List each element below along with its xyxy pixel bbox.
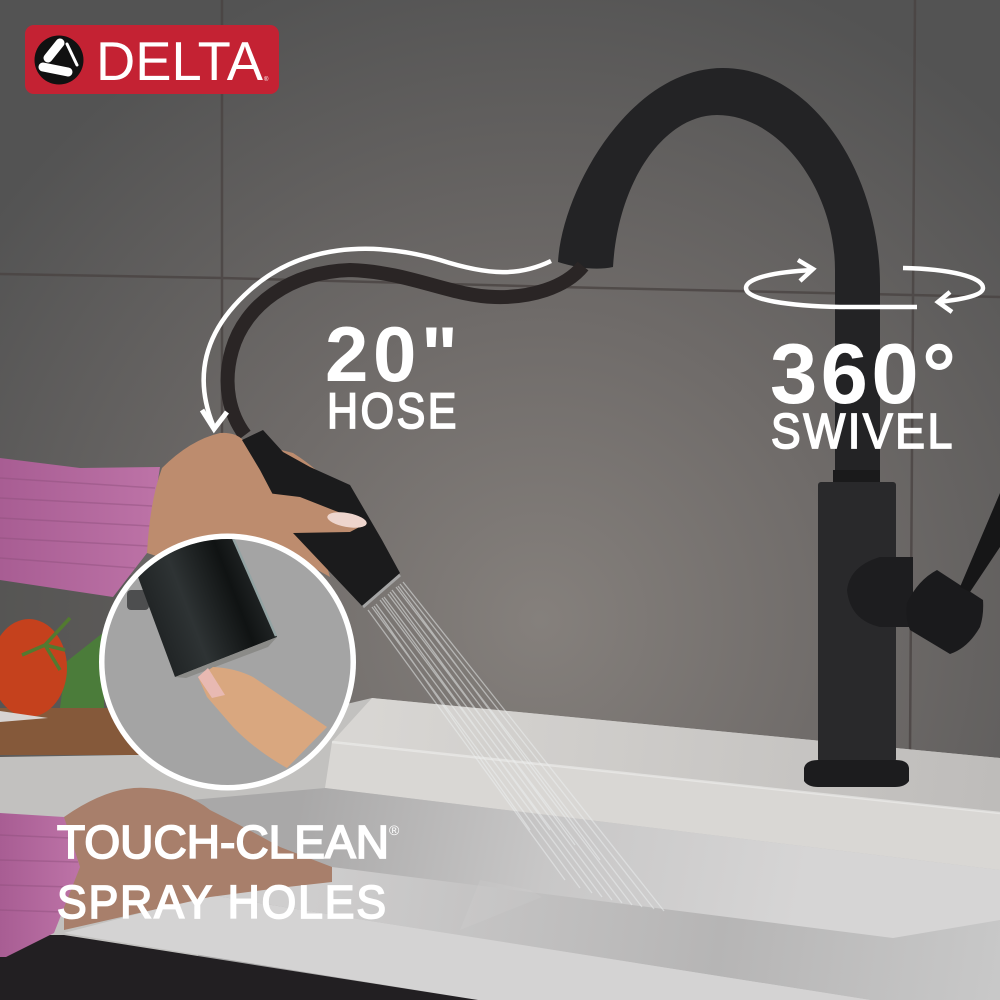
countertop and sink bbox=[0, 698, 1000, 1000]
label: touch-clean spray holes bbox=[57, 816, 400, 928]
faucet handle hub bbox=[847, 557, 913, 627]
Delta logo: DELTA bbox=[96, 30, 263, 92]
faucet lever bbox=[960, 493, 1000, 592]
hand bbox=[147, 433, 367, 577]
lower hand and sleeve bbox=[0, 788, 332, 957]
spray head bbox=[242, 430, 400, 607]
label: touch-clean spray holes: ® bbox=[389, 822, 400, 838]
label: 360 degree swivel: 360° bbox=[770, 327, 956, 422]
faucet handle cap bbox=[906, 570, 983, 654]
label: 20 inch hose: 20" bbox=[325, 310, 458, 398]
arrow: hose length bbox=[202, 249, 551, 429]
cutting board and vegetables bbox=[0, 618, 140, 755]
sleeve bbox=[0, 458, 160, 597]
inset circle: touch-clean spray holes bbox=[99, 520, 356, 790]
faucet base bbox=[804, 760, 909, 787]
faucet bbox=[558, 68, 1000, 787]
hose bbox=[228, 266, 583, 435]
Delta logo bbox=[25, 25, 279, 94]
label: touch-clean spray holes: TOUCH-CLEAN bbox=[57, 816, 389, 868]
water spray bbox=[368, 582, 664, 930]
thumb bbox=[220, 480, 367, 533]
label: 360 degree swivel: SWIVEL bbox=[771, 405, 955, 459]
faucet collar bbox=[833, 470, 880, 483]
label: touch-clean spray holes: SPRAY HOLES bbox=[57, 876, 388, 928]
faucet body bbox=[818, 482, 896, 762]
label: 20 inch hose bbox=[325, 310, 459, 439]
Delta logo: ® bbox=[264, 76, 269, 83]
arrow: swivel rotation bbox=[746, 260, 983, 312]
thumbnail bbox=[326, 510, 368, 530]
label: 20 inch hose: HOSE bbox=[327, 383, 459, 439]
hand with sprayer bbox=[0, 430, 400, 607]
faucet spout bbox=[558, 68, 880, 470]
